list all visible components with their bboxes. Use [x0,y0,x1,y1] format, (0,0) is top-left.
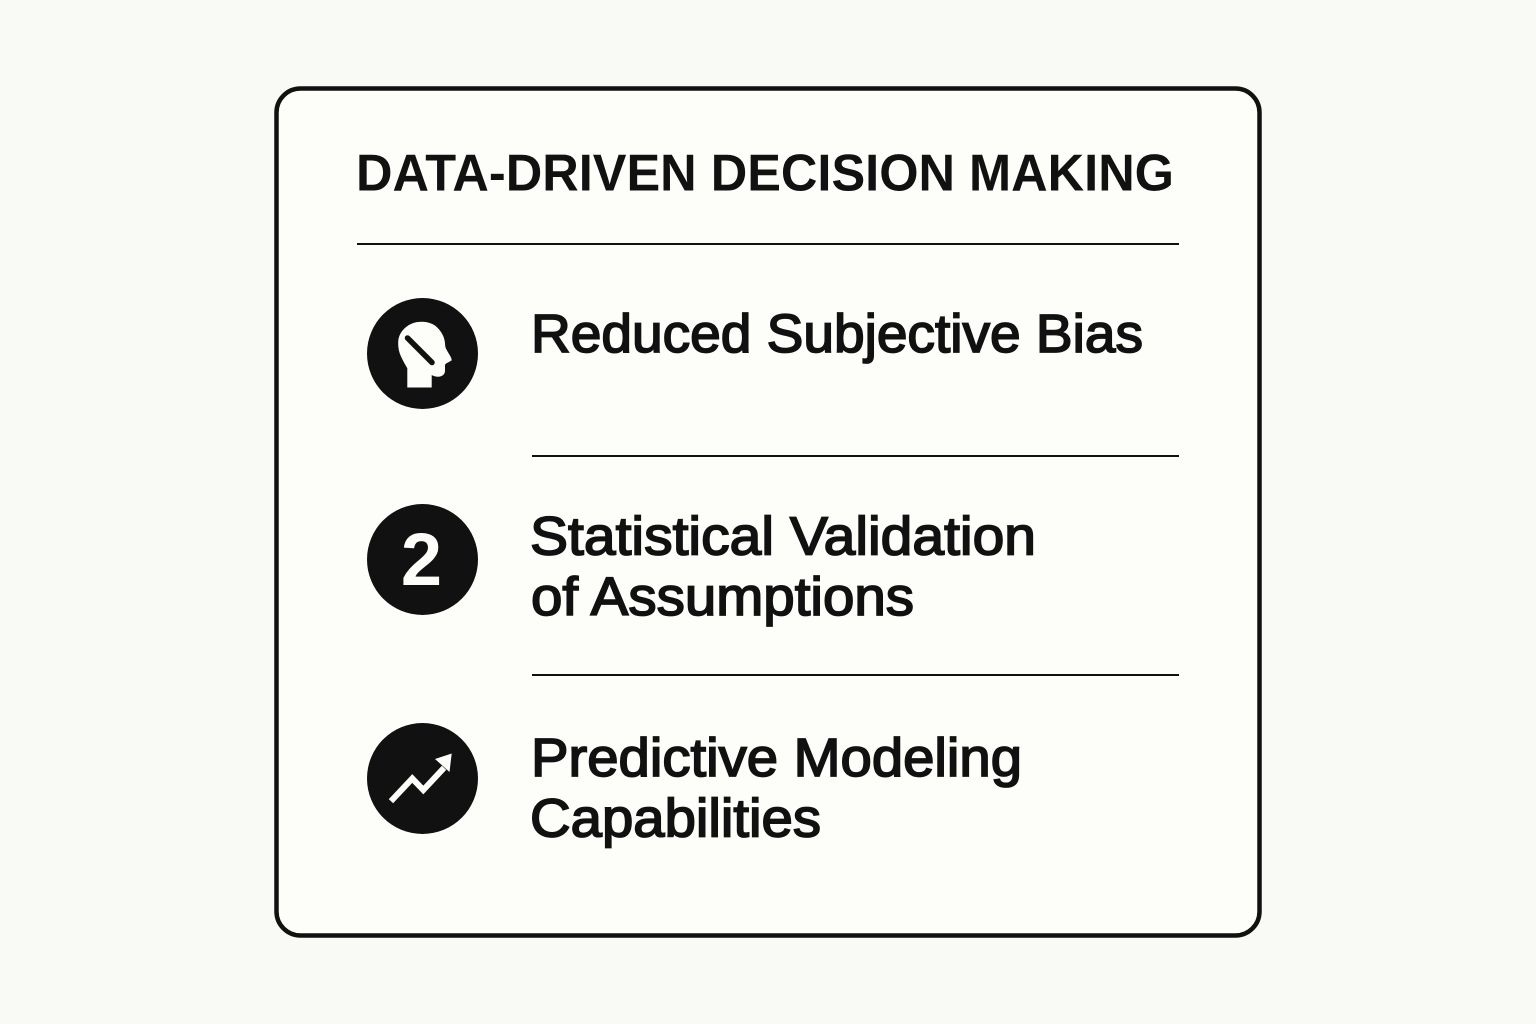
list item 3: predictive modeling capabilities [367,723,1022,848]
list item 1: reduced subjective bias [367,298,1143,409]
icon: head with slash [367,298,478,409]
item 2 label: Statistical Validation [530,506,1036,566]
icon: number 2 [367,504,478,615]
item 1 label: Reduced Subjective Bias [531,304,1143,364]
panel: data-driven decision making card [276,88,1260,936]
item 3 label: Predictive Modeling [531,728,1022,788]
title: DATA-DRIVEN DECISION MAKING [356,144,1174,202]
list item 2: statistical validation of assumptions [367,504,1036,627]
icon: number 2: 2 [401,518,442,601]
item 2 label second line: of Assumptions [531,567,914,627]
icon: rising trend arrow [367,723,478,834]
item 3 label second line: Capabilities [530,788,821,848]
